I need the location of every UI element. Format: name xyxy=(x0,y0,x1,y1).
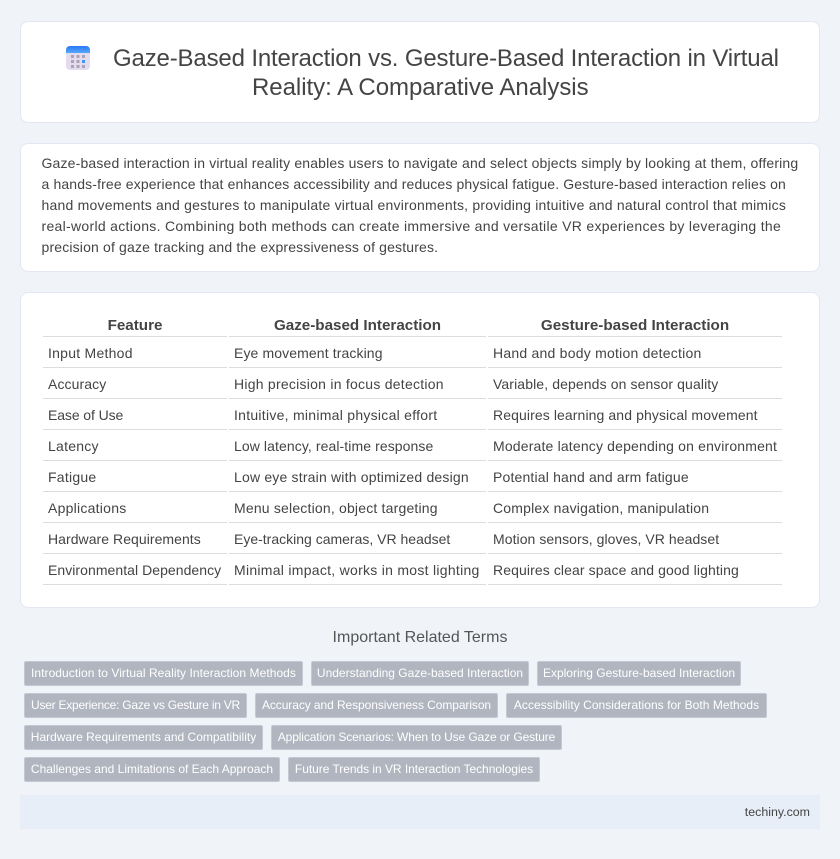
header panel xyxy=(20,21,820,123)
related term tags: Exploring Gesture-based Interaction xyxy=(543,666,735,680)
comparison table: Low eye strain with optimized design xyxy=(234,468,469,484)
related term tags: Challenges and Limitations of Each Approach xyxy=(31,762,273,776)
related term tags: User Experience: Gaze vs Gesture in VR xyxy=(31,698,240,712)
title: Gaze-Based Interaction vs. Gesture-Based Interaction in Virtual xyxy=(113,45,779,72)
icon: calendar xyxy=(66,46,90,70)
comparison table: Input Method xyxy=(48,344,133,360)
comparison table: Intuitive, minimal physical effort xyxy=(234,406,437,422)
comparison table: Requires clear space and good lighting xyxy=(493,562,739,578)
comparison table: Low latency, real-time response xyxy=(234,438,433,454)
intro text block: real-world actions. Combining both methods can create immersive and versatile VR experiences by leveraging the xyxy=(42,218,781,234)
comparison table: Variable, depends on sensor quality xyxy=(493,376,718,392)
comparison table: Complex navigation, manipulation xyxy=(493,500,709,516)
heading: important related terms: Important Related Terms xyxy=(333,629,507,646)
comparison table: Eye movement tracking xyxy=(234,344,383,360)
related term tags: Hardware Requirements and Compatibility xyxy=(31,730,256,744)
comparison table: Requires learning and physical movement xyxy=(493,406,758,422)
comparison table: Menu selection, object targeting xyxy=(234,500,438,516)
intro text block: hand movements and gestures to manipulate virtual environments, providing intuitive and natural control that mimics xyxy=(42,197,786,213)
comparison table: Potential hand and arm fatigue xyxy=(493,468,689,484)
comparison table xyxy=(43,317,782,585)
title xyxy=(113,45,779,101)
footer credit: techiny.com xyxy=(745,805,810,819)
comparison table: Accuracy xyxy=(48,376,106,392)
title: Reality: A Comparative Analysis xyxy=(252,74,589,101)
comparison table: Applications xyxy=(48,500,126,516)
comparison table: Ease of Use xyxy=(48,406,123,422)
comparison table: Motion sensors, gloves, VR headset xyxy=(493,530,719,546)
related term tags xyxy=(24,661,767,782)
related term tags: Accuracy and Responsiveness Comparison xyxy=(262,698,491,712)
comparison table: Gaze-based Interaction xyxy=(274,317,441,334)
comparison table: Environmental Dependency xyxy=(48,562,221,578)
intro text block: Gaze-based interaction in virtual reality enables users to navigate and select objects simply by looking at them, offering xyxy=(42,155,798,171)
comparison table: Hardware Requirements xyxy=(48,530,201,546)
comparison table: Gesture-based Interaction xyxy=(541,317,729,334)
comparison table: Eye-tracking cameras, VR headset xyxy=(234,530,450,546)
intro text block xyxy=(42,155,798,255)
comparison table: Feature xyxy=(108,317,162,334)
comparison table: Latency xyxy=(48,438,99,454)
comparison table: Moderate latency depending on environment xyxy=(493,438,777,454)
related term tags: Introduction to Virtual Reality Interaction Methods xyxy=(31,666,296,680)
related term tags: Application Scenarios: When to Use Gaze or Gesture xyxy=(278,730,555,744)
footer bar xyxy=(20,795,820,829)
intro text block: a hands-free experience that enhances accessibility and reduces physical fatigue. Gesture-based interaction relies on xyxy=(42,176,786,192)
related term tags: Future Trends in VR Interaction Technologies xyxy=(295,762,533,776)
comparison table: High precision in focus detection xyxy=(234,376,444,392)
related term tags: Accessibility Considerations for Both Methods xyxy=(514,698,759,712)
comparison table: Hand and body motion detection xyxy=(493,344,702,360)
panel: comparison table xyxy=(20,292,820,608)
comparison table: Minimal impact, works in most lighting xyxy=(234,562,480,578)
related term tags: Understanding Gaze-based Interaction xyxy=(317,666,523,680)
comparison table: Fatigue xyxy=(48,468,96,484)
panel: intro summary xyxy=(20,143,820,272)
intro text block: precision of gaze tracking and the expressiveness of gestures. xyxy=(42,239,438,255)
